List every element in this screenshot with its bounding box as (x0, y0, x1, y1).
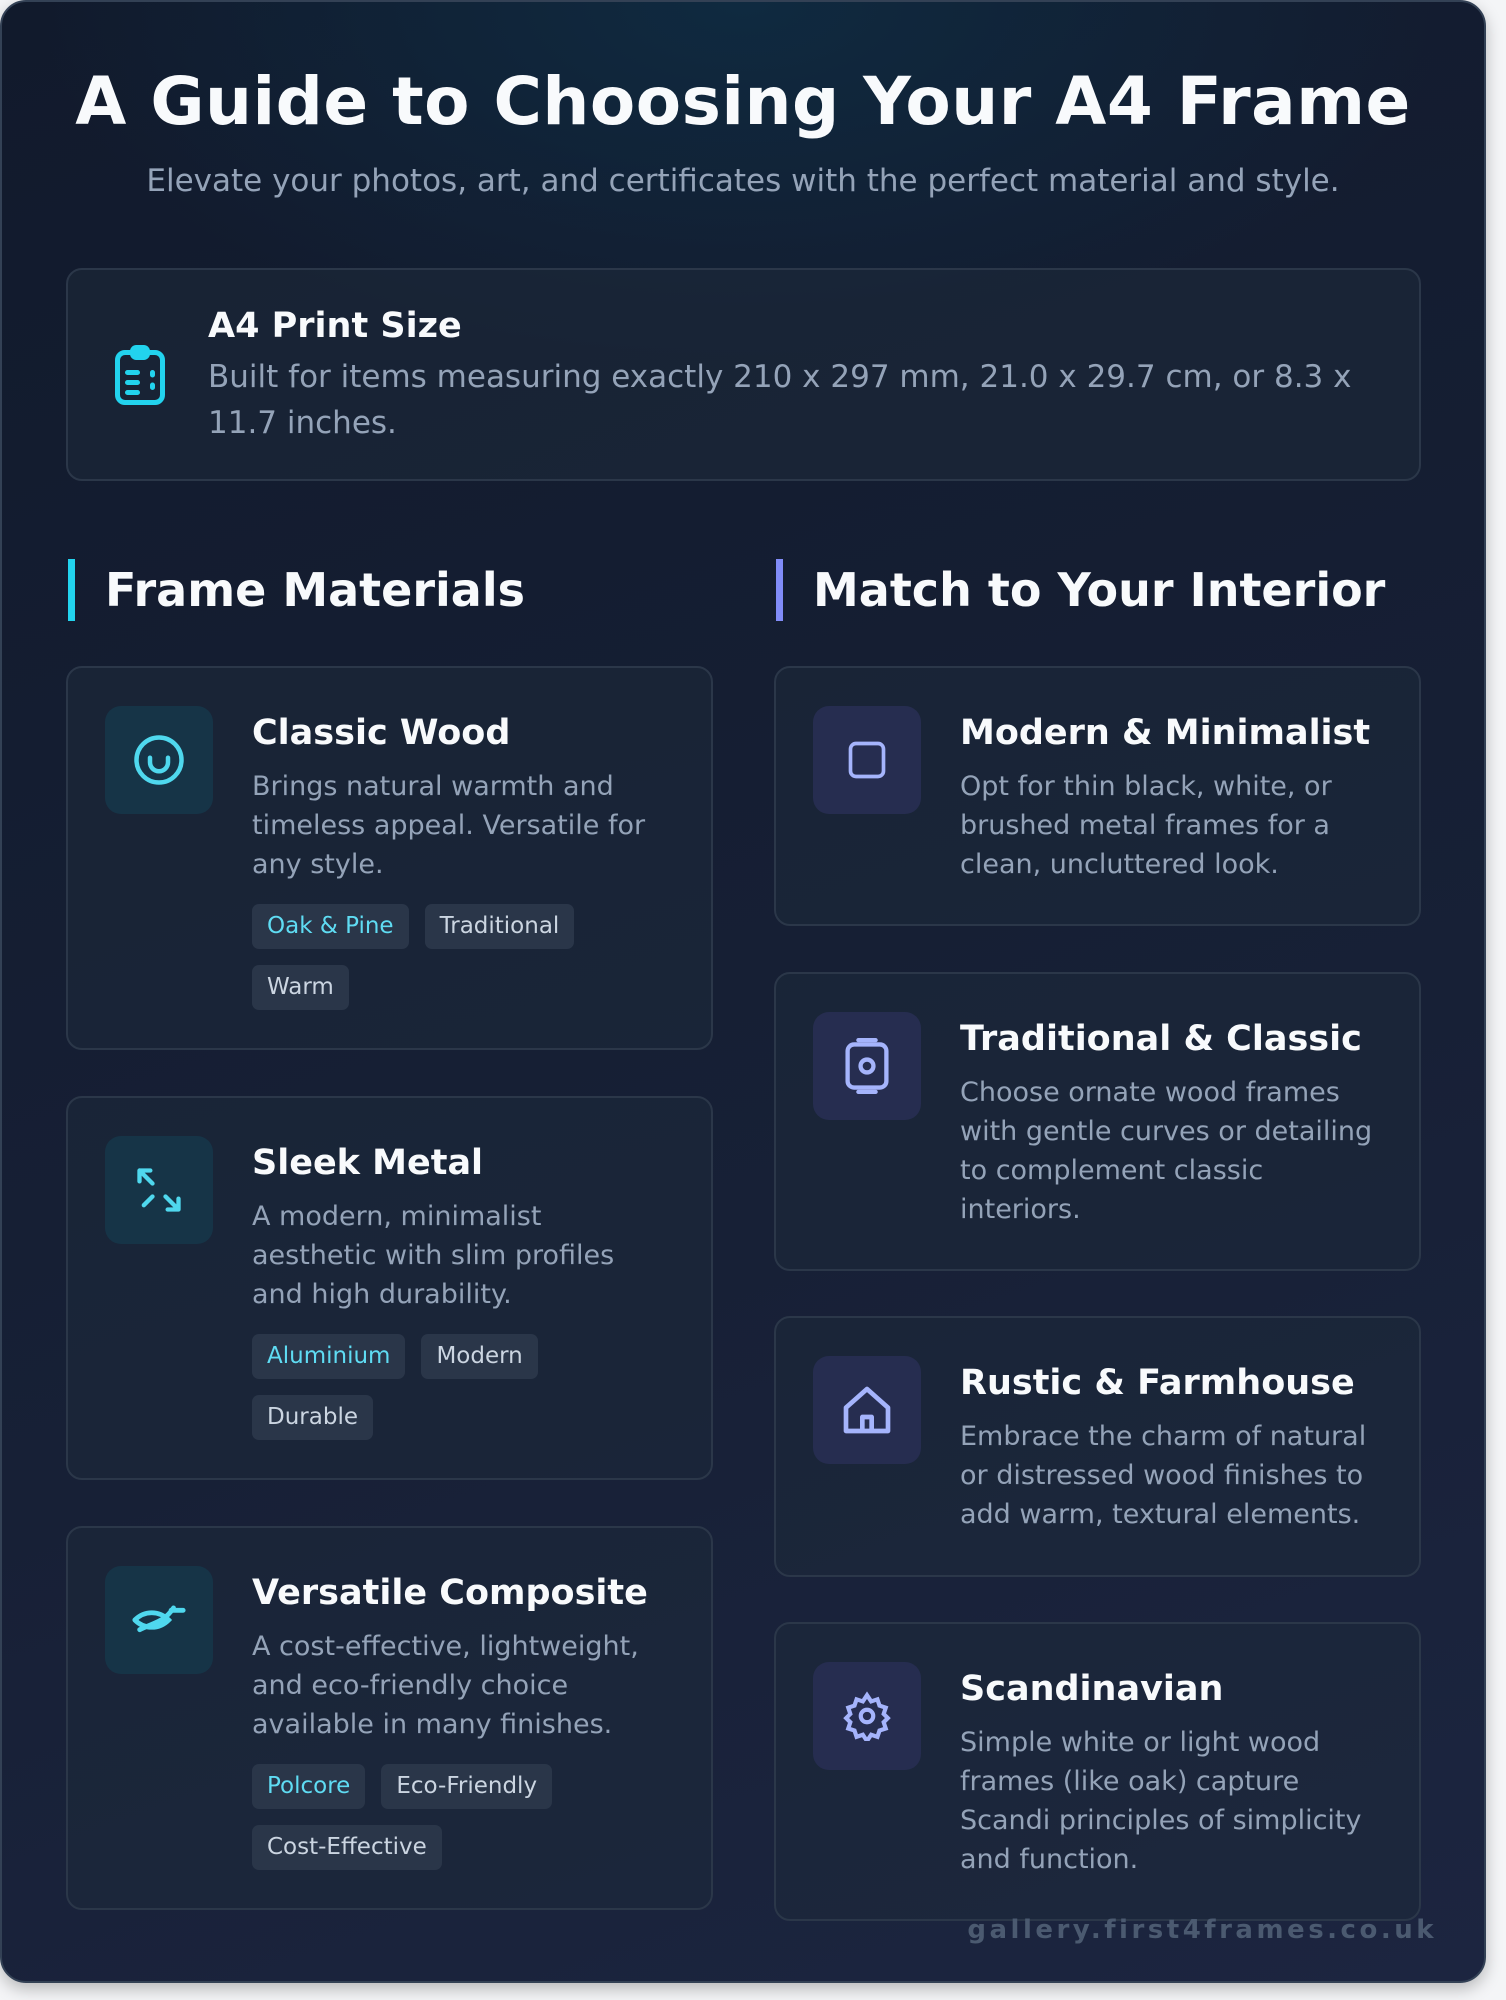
panel: Versatile Composite (66, 1526, 713, 1910)
footer: website: gallery.first4frames.co.uk (967, 1915, 1437, 1945)
text: Classic Wood (252, 713, 646, 1010)
text: Classic Wood: Brings natural warmth and timeless appeal. Versatile for any style. (252, 771, 645, 880)
text: Scandinavian: Scandinavian (960, 1669, 1223, 1709)
text: A4 size (208, 306, 1351, 441)
text: Versatile Composite (252, 1573, 648, 1870)
text: Sleek Metal: A modern, minimalist aesthetic with slim profiles and high durability. (252, 1201, 614, 1310)
text: Versatile Composite: Polcore (267, 1773, 350, 1799)
icon: leaf (105, 1566, 213, 1674)
subtitle: Elevate your photos, art, and certificates with the perfect material and style. (146, 163, 1340, 199)
icon: camera frame (813, 1012, 921, 1120)
heading: Match to Your Interior: Match to Your Interior (813, 563, 1385, 617)
panel: Sleek Metal (66, 1096, 713, 1480)
text: A4 size: A4 Print Size (208, 306, 462, 346)
text: Sleek Metal: Aluminium (267, 1343, 390, 1369)
icon: clipboard (115, 345, 165, 405)
text: Rustic (960, 1363, 1366, 1530)
panel: Modern & Minimalist (774, 666, 1421, 926)
text: Versatile Composite: Eco-Friendly (396, 1773, 537, 1799)
text: Classic Wood: Oak & Pine (267, 913, 394, 939)
text: Scandinavian: Simple white or light wood frames (like oak) capture Scandi principles of simplicity and function. (960, 1727, 1362, 1875)
icon: gear (813, 1662, 921, 1770)
panel: A4 print size (66, 268, 1421, 481)
text: Versatile Composite: Cost-Effective (267, 1834, 427, 1860)
text: Traditional: Traditional & Classic (960, 1019, 1362, 1059)
icon: house (813, 1356, 921, 1464)
panel: Rustic & Farmhouse (774, 1316, 1421, 1577)
icon: smile (105, 706, 213, 814)
icon: arrows (105, 1136, 213, 1244)
text: Sleek Metal: Durable (267, 1404, 358, 1430)
text: A4 size: Built for items measuring exactly 210 x 297 mm, 21.0 x 29.7 cm, or 8.3 x 11.7 inches. (208, 359, 1351, 441)
text: Rustic: Embrace the charm of natural or distressed wood finishes to add warm, textural elements. (960, 1421, 1366, 1530)
text: Versatile Composite: Versatile Composite (252, 1573, 648, 1613)
panel: Classic Wood (66, 666, 713, 1050)
text: Classic Wood: Classic Wood (252, 713, 510, 753)
text: Versatile Composite: A cost-effective, lightweight, and eco-friendly choice available in many finishes. (252, 1631, 639, 1740)
panel: Traditional & Classic (774, 972, 1421, 1271)
text: Traditional: Choose ornate wood frames with gentle curves or detailing to complement classic interiors. (960, 1077, 1372, 1225)
icon: square (813, 706, 921, 814)
title: A Guide to Choosing Your A4 Frame (75, 63, 1411, 140)
text: Sleek Metal (252, 1143, 614, 1440)
text: Sleek Metal: Modern (436, 1343, 523, 1369)
text: Rustic: Rustic & Farmhouse (960, 1363, 1355, 1403)
text: Modern: Modern & Minimalist (960, 713, 1370, 753)
text: Classic Wood: Warm (267, 974, 334, 1000)
text: Modern: Opt for thin black, white, or brushed metal frames for a clean, uncluttered look. (960, 771, 1332, 880)
panel: Scandinavian (774, 1622, 1421, 1921)
text: Classic Wood: Traditional (440, 913, 559, 939)
text: Modern (960, 713, 1370, 880)
heading: Frame Materials: Frame Materials (105, 563, 525, 617)
text: Sleek Metal: Sleek Metal (252, 1143, 483, 1183)
